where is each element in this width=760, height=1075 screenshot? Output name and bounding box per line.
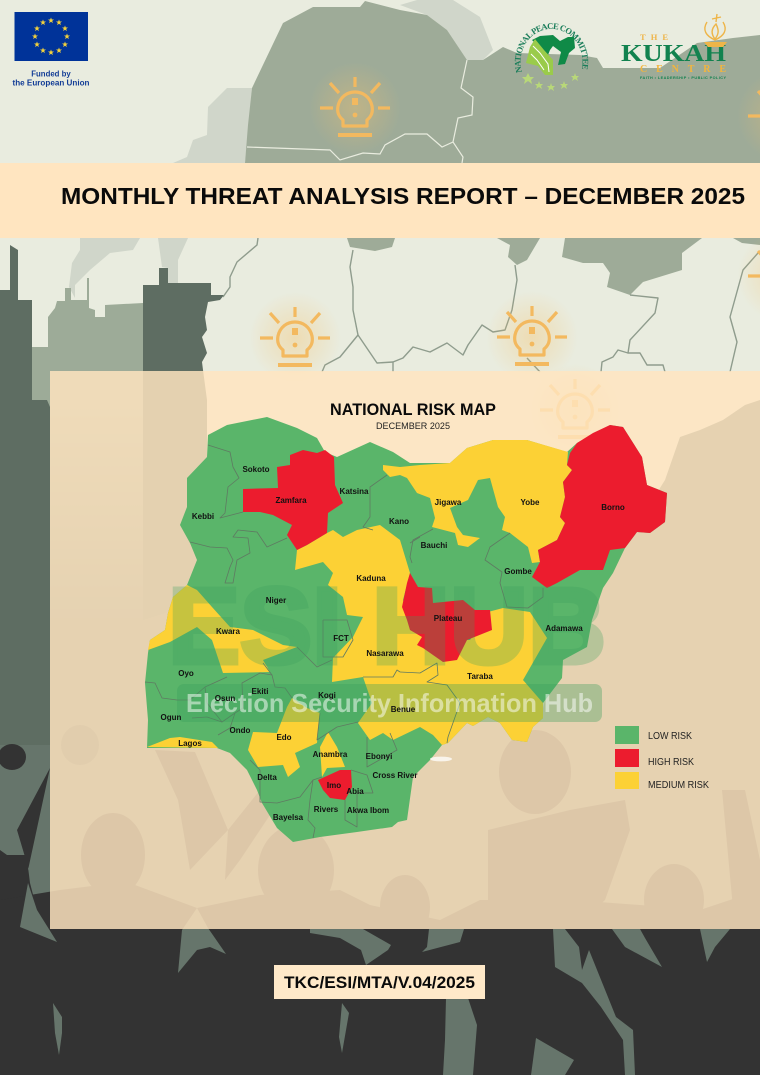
logo: The Kukah Centre: CENTRE xyxy=(640,64,726,75)
map state labels: Rivers xyxy=(314,805,339,814)
panel: map panel xyxy=(50,371,760,929)
map state labels: Adamawa xyxy=(545,624,583,633)
heading: national risk map xyxy=(330,401,496,432)
map state labels: Kogi xyxy=(318,691,336,700)
state: Kwara medium risk xyxy=(148,585,297,673)
heading: national risk map: NATIONAL RISK MAP xyxy=(330,401,496,419)
logo: The Kukah Centre xyxy=(621,14,727,80)
title band xyxy=(0,163,760,238)
map state labels: Niger xyxy=(266,596,286,605)
reference code label xyxy=(274,965,485,999)
map state labels: FCT xyxy=(333,634,349,643)
state borders xyxy=(145,445,543,838)
map state labels: Akwa Ibom xyxy=(347,806,389,815)
map state labels: Jigawa xyxy=(435,498,462,507)
logo: National Peace Committee: NATIONAL PEACE COMMITTEE xyxy=(514,23,588,74)
legend: MEDIUM RISK xyxy=(648,780,709,791)
map state labels: Oyo xyxy=(178,669,194,678)
state: Borno high risk xyxy=(532,425,667,588)
map state labels: Kaduna xyxy=(356,574,386,583)
map state labels: Lagos xyxy=(178,739,202,748)
icon: alert lamp top centre xyxy=(309,62,401,154)
map state labels: Kwara xyxy=(216,627,241,636)
icon: alert lamp centre xyxy=(486,291,578,383)
logo: The Kukah Centre: FAITH • LEADERSHIP • PUBLIC POLICY xyxy=(640,76,726,80)
map state labels: Plateau xyxy=(434,614,462,623)
map state labels xyxy=(161,465,625,822)
map state labels: Kano xyxy=(389,517,409,526)
map state labels: Imo xyxy=(327,781,341,790)
map state labels: Nasarawa xyxy=(366,649,404,658)
legend: LOW RISK xyxy=(648,731,692,742)
map state labels: Anambra xyxy=(313,750,348,759)
title: MONTHLY THREAT ANALYSIS REPORT – DECEMBER 2025 xyxy=(61,183,745,209)
logo: EU flag and funding note: the European Union xyxy=(12,78,90,88)
icon: torch xyxy=(704,14,727,47)
watermark: Election Security Information Hub: Election Security Information Hub xyxy=(186,688,593,718)
logo: National Peace Committee xyxy=(514,23,588,91)
state: Kaduna, Nasarawa, Benue and Taraba medium risk xyxy=(295,525,547,745)
background: factory skyline xyxy=(0,238,224,740)
map state labels: Bauchi xyxy=(421,541,447,550)
map state labels: Katsina xyxy=(340,487,369,496)
map state labels: Yobe xyxy=(521,498,540,507)
map state labels: Osun xyxy=(215,694,235,703)
logo: EU flag and funding note xyxy=(12,12,90,88)
map state labels: Ekiti xyxy=(252,687,268,696)
icon: alert lamp top right xyxy=(737,70,760,162)
map state labels: Kebbi xyxy=(192,512,214,521)
background: grey map borders and regions xyxy=(223,238,760,372)
base: low risk states xyxy=(145,417,667,842)
state: Plateau high risk xyxy=(402,573,492,662)
map state labels: Benue xyxy=(391,705,416,714)
icon: alert lamp right edge xyxy=(737,230,760,322)
icon: faint alert lamp behind panel xyxy=(529,364,621,456)
map state labels: Zamfara xyxy=(275,496,307,505)
logo: The Kukah Centre: THE xyxy=(640,32,668,42)
map state labels: Gombe xyxy=(504,567,532,576)
state: Imo high risk xyxy=(318,770,352,800)
map state labels: Taraba xyxy=(467,672,493,681)
logo: EU flag and funding note: Funded by xyxy=(31,70,71,78)
map state labels: Abia xyxy=(346,787,364,796)
map state labels: Ebonyi xyxy=(366,752,392,761)
state: Anambra medium risk xyxy=(320,732,345,777)
map state labels: Edo xyxy=(276,733,292,742)
state: Zamfara high risk xyxy=(243,450,343,550)
map state labels: Ondo xyxy=(230,726,251,735)
reference code label: TKC/ESI/MTA/V.04/2025 xyxy=(284,973,475,992)
state: Lagos medium risk xyxy=(147,737,218,748)
map state labels: Bayelsa xyxy=(273,813,304,822)
state: Edo medium risk xyxy=(248,698,320,777)
map state labels: Borno xyxy=(601,503,625,512)
legend: HIGH RISK xyxy=(648,757,694,768)
logo: The Kukah Centre: KUKAH xyxy=(621,41,726,67)
map state labels: Cross River xyxy=(373,771,417,780)
background: top map silhouette xyxy=(173,0,760,163)
icon: alert lamp left xyxy=(249,292,341,384)
subheading: date: DECEMBER 2025 xyxy=(376,421,450,432)
map state labels: Delta xyxy=(257,773,277,782)
watermark: ESI HUB: ESI HUB xyxy=(168,565,606,686)
background: crowd silhouettes xyxy=(0,400,760,1075)
map state labels: Ogun xyxy=(161,713,182,722)
map: national risk map xyxy=(145,417,667,842)
legend xyxy=(615,726,709,791)
state: Jigawa and Yobe medium risk xyxy=(383,440,572,563)
map state labels: Sokoto xyxy=(242,465,270,474)
